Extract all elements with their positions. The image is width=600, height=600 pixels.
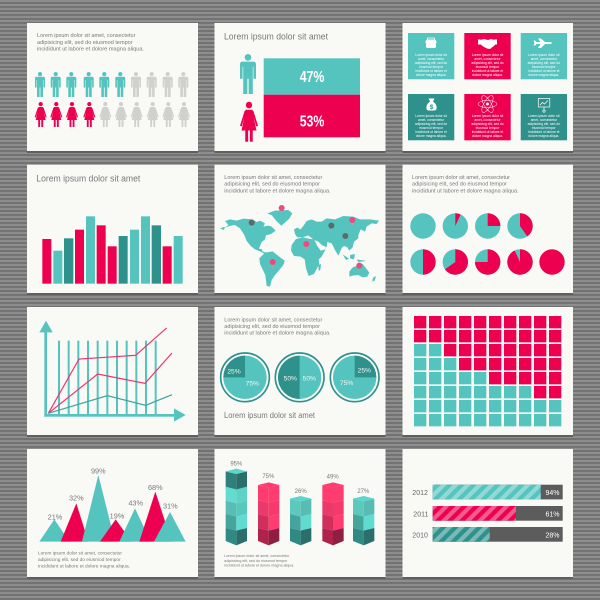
tile: handshake: eiusmod tempor bbox=[476, 65, 500, 69]
text block: intro: Lorem ipsum dolor sit amet, consectetur bbox=[37, 33, 136, 39]
tile: presentation bbox=[521, 94, 567, 140]
icons: row of men bbox=[35, 72, 188, 97]
tile: handshake: adipisicing elit, sed do bbox=[471, 61, 504, 65]
panel: world map bbox=[214, 165, 386, 293]
tile: presentation: eiusmod tempor bbox=[532, 126, 557, 130]
ring charts: 50% bbox=[303, 376, 316, 383]
map pins bbox=[249, 205, 362, 272]
tile: money bag: Lorem ipsum dolor sit bbox=[415, 114, 447, 118]
column 26%: 26% bbox=[295, 489, 307, 495]
tile: basket: adipisicing elit, sed do bbox=[415, 61, 447, 65]
world map bbox=[220, 205, 379, 287]
bar: 2011 bbox=[413, 506, 563, 521]
tile: atom: incididunt ut labore et bbox=[472, 130, 503, 134]
tile: basket: amet, consectetur bbox=[418, 57, 445, 61]
heading: Lorem ipsum dolor sit amet bbox=[36, 173, 141, 183]
ring charts bbox=[221, 353, 379, 402]
bar: 2010: 2010 bbox=[412, 532, 428, 539]
data lines bbox=[48, 328, 172, 413]
text block: intro: incididunt ut labore et dolore magna aliqua. bbox=[224, 331, 331, 337]
tile: plane bbox=[521, 33, 567, 79]
tile: presentation: adipisicing elit, sed do bbox=[528, 122, 560, 126]
panel: triangle chart bbox=[27, 449, 198, 577]
icon: presentation board bbox=[538, 98, 550, 112]
icon: money bag: $ bbox=[430, 104, 434, 111]
panel: isometric columns bbox=[214, 449, 386, 577]
axes bbox=[39, 321, 186, 422]
tile: money bag: dolore magna aliqua. bbox=[416, 134, 447, 138]
bar: 2011: 61% bbox=[545, 511, 560, 518]
column 26% bbox=[290, 489, 311, 545]
tile: basket: Lorem ipsum dolor sit bbox=[415, 53, 447, 57]
tile: plane: dolore magna aliqua. bbox=[528, 73, 559, 77]
bar: men 47% bbox=[264, 58, 360, 95]
column chart bbox=[226, 461, 374, 545]
bar: 2011: 2011 bbox=[413, 511, 428, 518]
triangle peaks chart: 99% bbox=[91, 467, 106, 476]
tile: atom: eiusmod tempor bbox=[476, 126, 500, 130]
icon: basket bbox=[425, 38, 437, 48]
panel: ring percent charts bbox=[214, 307, 386, 435]
text block: intro: incididunt ut labore et dolore magna aliqua. bbox=[37, 47, 144, 53]
ring charts: 75% bbox=[340, 380, 353, 387]
bar: 2010 bbox=[412, 527, 563, 542]
column 49%: 49% bbox=[327, 475, 339, 481]
column 49% bbox=[322, 475, 344, 545]
tile: handshake: Lorem ipsum dolor sit bbox=[472, 53, 503, 57]
panel: waffle grid bbox=[402, 307, 573, 435]
pie charts bbox=[410, 213, 565, 275]
ring charts: 50% bbox=[284, 376, 297, 383]
tile: money bag: amet, consectetur bbox=[418, 118, 445, 122]
bar: women 53% bbox=[264, 95, 360, 137]
panel: striped progress bars bbox=[402, 449, 573, 577]
tile: plane: amet, consectetur bbox=[531, 57, 558, 61]
text block: intro: adipisicing elit, sed do eiusmod tempor bbox=[412, 182, 507, 188]
tile: handshake bbox=[464, 33, 511, 79]
text block: caption: adipisicing elit, sed do eiusmod tempor bbox=[224, 559, 288, 563]
panel: gender split bbox=[214, 23, 386, 151]
bar: 2012: 94% bbox=[545, 490, 560, 497]
column 27% bbox=[353, 489, 374, 545]
tile: money bag: incididunt ut labore et bbox=[415, 130, 447, 134]
tile: basket: incididunt ut labore et bbox=[415, 69, 447, 73]
triangle peaks chart: 19% bbox=[110, 511, 125, 520]
tile: presentation: Lorem ipsum dolor sit bbox=[528, 114, 560, 118]
triangle peaks chart: 31% bbox=[163, 502, 178, 511]
bar: men 47%: 47% bbox=[300, 69, 324, 86]
triangle peaks chart: 32% bbox=[69, 494, 84, 503]
text block: intro: incididunt ut labore et dolore magna aliqua. bbox=[224, 188, 331, 194]
text block: caption: adipisicing elit, sed do eiusmod tempor bbox=[38, 557, 121, 563]
text block: intro: incididunt ut labore et dolore magna aliqua. bbox=[412, 188, 519, 194]
tile: presentation: incididunt ut labore et bbox=[528, 130, 560, 134]
text block: intro: adipisicing elit, sed do eiusmod tempor bbox=[37, 40, 133, 46]
tile: plane: adipisicing elit, sed do bbox=[528, 61, 560, 65]
line chart bbox=[39, 321, 186, 422]
ring charts: 25% bbox=[227, 368, 241, 375]
text block: intro bbox=[224, 317, 331, 337]
icon: atom bbox=[478, 94, 497, 114]
tile: plane: eiusmod tempor bbox=[532, 65, 557, 69]
text block: caption: Lorem ipsum dolor sit amet, consectetur bbox=[224, 554, 290, 558]
tile: basket: dolore magna aliqua. bbox=[416, 73, 447, 77]
column 95%: 95% bbox=[230, 461, 243, 467]
heading: Lorem ipsum dolor sit amet bbox=[224, 411, 316, 420]
bar: 2012: 2012 bbox=[412, 490, 428, 497]
column 75%: 75% bbox=[262, 474, 275, 480]
text block: caption bbox=[224, 554, 294, 568]
tile: handshake: incididunt ut labore et bbox=[472, 69, 503, 73]
text block: intro bbox=[412, 175, 519, 194]
bar: women 53%: 53% bbox=[300, 114, 324, 131]
tile: handshake: dolore magna aliqua. bbox=[472, 73, 503, 77]
heading: Lorem ipsum dolor sit amet bbox=[224, 31, 328, 41]
icon: handshake bbox=[478, 39, 497, 49]
panel: line chart bbox=[27, 307, 198, 435]
ring charts: 25% bbox=[358, 368, 371, 375]
tile: plane: incididunt ut labore et bbox=[528, 69, 560, 73]
tile: atom bbox=[464, 94, 511, 140]
icon: plane bbox=[534, 38, 552, 48]
tile: atom: amet, consectetur bbox=[474, 118, 501, 122]
column 27%: 27% bbox=[357, 489, 370, 495]
tile: atom: Lorem ipsum dolor sit bbox=[472, 114, 503, 118]
bar chart bbox=[42, 216, 183, 284]
triangle peaks chart: 43% bbox=[128, 499, 143, 508]
tile: plane: Lorem ipsum dolor sit bbox=[528, 53, 560, 57]
text block: caption: Lorem ipsum dolor sit amet, consectetur bbox=[38, 550, 122, 556]
bar: 2010: 28% bbox=[545, 532, 560, 539]
panel: people icon rows bbox=[27, 23, 198, 151]
tile: money bag bbox=[408, 94, 454, 140]
ring charts: 75% bbox=[246, 381, 259, 388]
icons: row of women bbox=[35, 102, 190, 127]
column 95% bbox=[226, 461, 247, 545]
text block: intro: adipisicing elit, sed do eiusmod tempor bbox=[224, 182, 320, 188]
text block: intro bbox=[224, 175, 331, 194]
text block: intro: Lorem ipsum dolor sit amet, consectetur bbox=[224, 317, 322, 323]
triangle peaks chart: 68% bbox=[148, 483, 163, 492]
text block: intro: Lorem ipsum dolor sit amet, consectetur bbox=[412, 175, 510, 181]
tile: atom: adipisicing elit, sed do bbox=[471, 122, 504, 126]
tile: money bag: adipisicing elit, sed do bbox=[415, 122, 447, 126]
tile: money bag: eiusmod tempor bbox=[419, 126, 444, 130]
text block: caption: incididunt ut labore et dolore magna aliqua. bbox=[38, 564, 130, 570]
tile: basket: eiusmod tempor bbox=[419, 65, 444, 69]
waffle chart bbox=[414, 316, 561, 426]
panel: bar chart bbox=[27, 165, 198, 293]
text block: caption: incididunt ut labore et dolore magna aliqua. bbox=[224, 564, 294, 568]
icon: woman bbox=[240, 102, 258, 142]
text block: intro bbox=[37, 33, 144, 53]
tile: presentation: amet, consectetur bbox=[531, 118, 558, 122]
panel: pie charts bbox=[402, 165, 573, 293]
tile: handshake: amet, consectetur bbox=[474, 57, 501, 61]
text block: caption bbox=[38, 550, 130, 570]
bar: 2012 bbox=[412, 485, 563, 499]
column 75% bbox=[258, 474, 279, 545]
triangle peaks chart bbox=[39, 467, 186, 542]
icon: man bbox=[240, 54, 256, 94]
panel: icon tiles bbox=[402, 23, 573, 151]
text block: intro: adipisicing elit, sed do eiusmod tempor bbox=[224, 324, 320, 330]
text block: intro: Lorem ipsum dolor sit amet, consectetur bbox=[224, 175, 322, 181]
triangle peaks chart: 21% bbox=[48, 512, 63, 521]
tile: basket bbox=[408, 33, 454, 79]
tile: atom: dolore magna aliqua. bbox=[472, 134, 503, 138]
tile: presentation: dolore magna aliqua. bbox=[528, 134, 559, 138]
